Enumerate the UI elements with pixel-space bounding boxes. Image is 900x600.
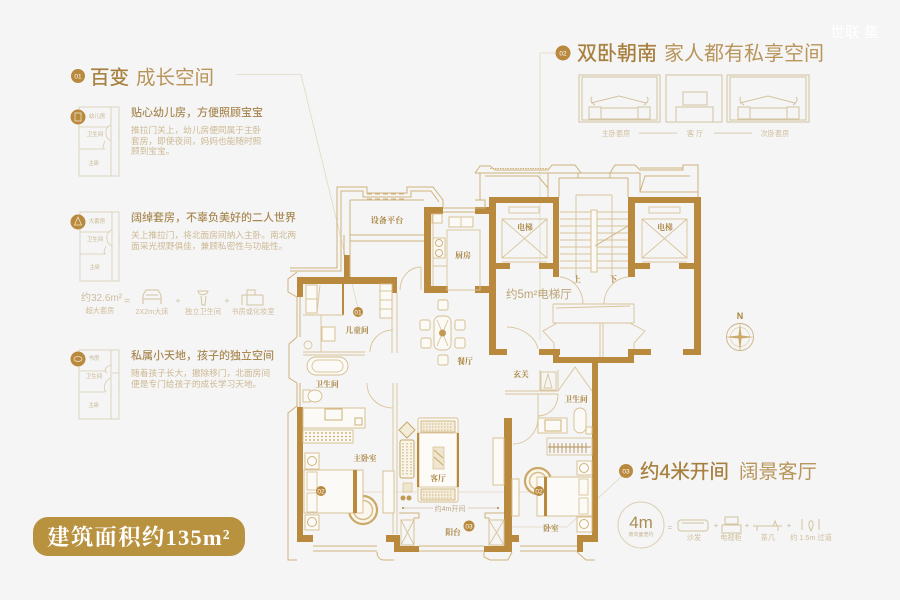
- text: child study: 随着孩子长大，撤除移门，北面房间: [131, 367, 270, 378]
- formula: suite equals bed, bathroom and study: +: [175, 296, 181, 306]
- dimension: about 4m bay: 约4m开间: [435, 504, 465, 513]
- room: kitchen: 厨房: [455, 250, 471, 260]
- mini plan: nursery: 幼儿房: [89, 112, 106, 120]
- formula: suite equals bed, bathroom and study: 独立卫生间: [185, 307, 221, 316]
- room: second bedroom: 卧室: [543, 523, 559, 533]
- circle: 4m width: 南向面宽约: [628, 531, 654, 538]
- mini plan: child study: 书房: [88, 354, 100, 362]
- circle: 4m width: [618, 502, 664, 548]
- staircase: 上: [573, 274, 581, 284]
- heading: 03 约4米开间: [619, 461, 817, 483]
- captions: room sequence: 客 厅: [687, 129, 703, 138]
- icon: bed: [143, 290, 161, 304]
- room: entrance: 玄关: [513, 369, 529, 379]
- formula: suite equals bed, bathroom and study: 约32.6m²: [81, 291, 123, 304]
- text: nursery: 贴心幼儿房，方便照顾宝宝: [131, 105, 263, 119]
- right elevator: 电梯: [657, 222, 673, 232]
- formula: sofa, tv cabinet, table, aisle: [668, 517, 832, 542]
- formula: sofa, tv cabinet, table, aisle: 沙发: [687, 533, 701, 542]
- text: suite: 面采光视野俱佳，兼顾私密性与功能性。: [131, 240, 287, 251]
- room: living room: [399, 418, 459, 502]
- icon: master bedroom elevation: [579, 75, 660, 122]
- door arcs: [367, 267, 628, 444]
- icon: child study badge: [70, 352, 86, 366]
- text: child study: [131, 348, 274, 389]
- mini plan: nursery: [79, 107, 119, 176]
- panel: 03 about 4m living room: [618, 461, 832, 548]
- interior thin partitions: [303, 290, 645, 534]
- mini plan: child study: [79, 350, 119, 419]
- formula: sofa, tv cabinet, table, aisle: 约 1.5m 过道: [790, 533, 832, 542]
- room: master bathroom: [303, 357, 365, 428]
- icon: suite badge: [70, 214, 86, 230]
- formula: sofa, tv cabinet, table, aisle: 茶几: [761, 533, 775, 542]
- icon: second bedroom elevation: [727, 75, 809, 122]
- formula: suite equals bed, bathroom and study: +: [224, 296, 230, 306]
- room: master bathroom: 卫生间: [315, 379, 339, 389]
- mini plan: suite: 卫生间: [87, 235, 103, 243]
- heading: 03 约4米开间: 03: [622, 468, 630, 476]
- mini plan: suite: [80, 212, 119, 281]
- left elevator: [502, 207, 547, 262]
- mini plan: suite: 大套房: [89, 217, 106, 225]
- text: nursery: 推拉门关上，幼儿房便同属于主卧: [131, 124, 262, 135]
- room: dining: 餐厅: [457, 356, 473, 366]
- staircase: 下: [609, 274, 617, 284]
- circle: 4m width: 4m: [629, 513, 653, 532]
- dimension: about 4m bay: [402, 504, 499, 513]
- formula: suite equals bed, bathroom and study: =: [124, 296, 130, 307]
- icon: sofa: [678, 520, 708, 531]
- room: equipment platform label: 设备平台: [371, 215, 404, 225]
- icon: aisle: [802, 519, 819, 531]
- text: suite: 关上推拉门，将北面房间纳入主卧。南北两: [131, 229, 296, 240]
- room: living room: 客厅: [430, 473, 446, 483]
- room: balcony: [399, 513, 504, 545]
- heading: 01 百变 成长空间: [71, 67, 214, 89]
- room: kitchen: [432, 214, 480, 290]
- text: child study: 私属小天地，孩子的独立空间: [131, 348, 274, 362]
- text: nursery: 套房，即使夜间，妈妈也能随时照: [131, 135, 262, 146]
- outer outlines and windows: [288, 165, 698, 560]
- icon: desk: [242, 290, 263, 305]
- heading: 02 双卧朝南: [556, 42, 824, 65]
- icon: wash basin: [198, 291, 208, 305]
- icon: living room elevation: [666, 75, 722, 122]
- left elevator: 电梯: [517, 222, 533, 232]
- room: second bathroom: [538, 394, 592, 434]
- icon: tv cabinet: [722, 517, 741, 533]
- room: child room: 儿童间: [345, 325, 369, 335]
- leader lines: [236, 53, 622, 527]
- text: nursery: [131, 105, 263, 156]
- room: second bedroom: 02: [535, 488, 543, 496]
- formula: sofa, tv cabinet, table, aisle: 电视柜: [720, 533, 742, 542]
- mini plan: child study: 主卧: [88, 401, 100, 409]
- room: child room: [304, 284, 392, 349]
- heading: 03 约4米开间: 约4米开间: [640, 461, 729, 483]
- compass: [725, 311, 754, 352]
- icon: coffee table: [753, 521, 782, 531]
- badge: floor area: [33, 517, 245, 556]
- panel: 02 two south bedrooms: [556, 42, 824, 138]
- captions: room sequence: 次卧套房: [761, 129, 789, 138]
- room: second bedroom: [493, 438, 592, 533]
- room: child room: 01: [354, 310, 362, 316]
- formula: sofa, tv cabinet, table, aisle: +: [745, 521, 750, 530]
- mini plan: child study: 卫生间: [86, 372, 102, 380]
- room: dining: [420, 300, 473, 366]
- room: balcony: 03: [465, 524, 473, 530]
- mini plan: nursery: 主卧: [88, 159, 100, 167]
- structural walls: [297, 197, 701, 552]
- heading: 01 百变 成长空间: 成长空间: [136, 67, 214, 89]
- formula: sofa, tv cabinet, table, aisle: +: [714, 521, 719, 530]
- label: about 5 square meter lobby: 约5m²电梯厅: [506, 287, 572, 301]
- room: second bathroom: 卫生间: [564, 394, 588, 404]
- room: master bedroom: [303, 430, 394, 530]
- heading: 01 百变 成长空间: 百变: [90, 67, 129, 89]
- heading: 02 双卧朝南: 02: [559, 50, 567, 58]
- text: nursery: 顾到宝宝。: [131, 145, 174, 156]
- room: master bedroom: 02: [317, 488, 325, 496]
- floor plan: [288, 165, 754, 560]
- panel: 01 flexible growing space: [70, 67, 296, 419]
- heading: 02 双卧朝南: 双卧朝南: [577, 42, 657, 65]
- heading: 01 百变 成长空间: 01: [74, 74, 82, 80]
- heading: 02 双卧朝南: 家人都有私享空间: [664, 42, 824, 65]
- formula: sofa, tv cabinet, table, aisle: +: [787, 521, 792, 530]
- right elevator: [642, 207, 687, 262]
- mini plan: nursery: 卫生间: [87, 130, 103, 138]
- captions: room sequence: [602, 129, 789, 138]
- heading: 03 约4米开间: 阔景客厅: [739, 461, 817, 483]
- room: master bedroom: 主卧室: [353, 453, 377, 463]
- captions: room sequence: 主卧套房: [602, 129, 630, 138]
- formula: suite equals bed, bathroom and study: [81, 290, 275, 316]
- room: entrance: [513, 369, 556, 390]
- badge: floor area: 建筑面积约135m²: [47, 525, 231, 550]
- staircase: [560, 195, 628, 284]
- formula: sofa, tv cabinet, table, aisle: =: [668, 523, 673, 532]
- formula: suite equals bed, bathroom and study: 书房或化妆室: [231, 307, 275, 316]
- room: balcony: 阳台: [445, 527, 461, 537]
- text: suite: 阔绰套房，不辜负美好的二人世界: [131, 210, 296, 224]
- text: suite: [131, 210, 296, 251]
- text: child study: 便是专门给孩子的成长学习天地。: [131, 378, 261, 389]
- formula: suite equals bed, bathroom and study: 超大套房: [86, 306, 114, 315]
- compass: N: [737, 311, 743, 321]
- icon: nursery badge: [70, 110, 86, 124]
- mini plan: suite: 主卧: [89, 263, 101, 271]
- watermark: 世联 集: [830, 24, 879, 41]
- formula: suite equals bed, bathroom and study: 2X2m大床: [135, 307, 169, 316]
- elevator lobby: [502, 195, 687, 301]
